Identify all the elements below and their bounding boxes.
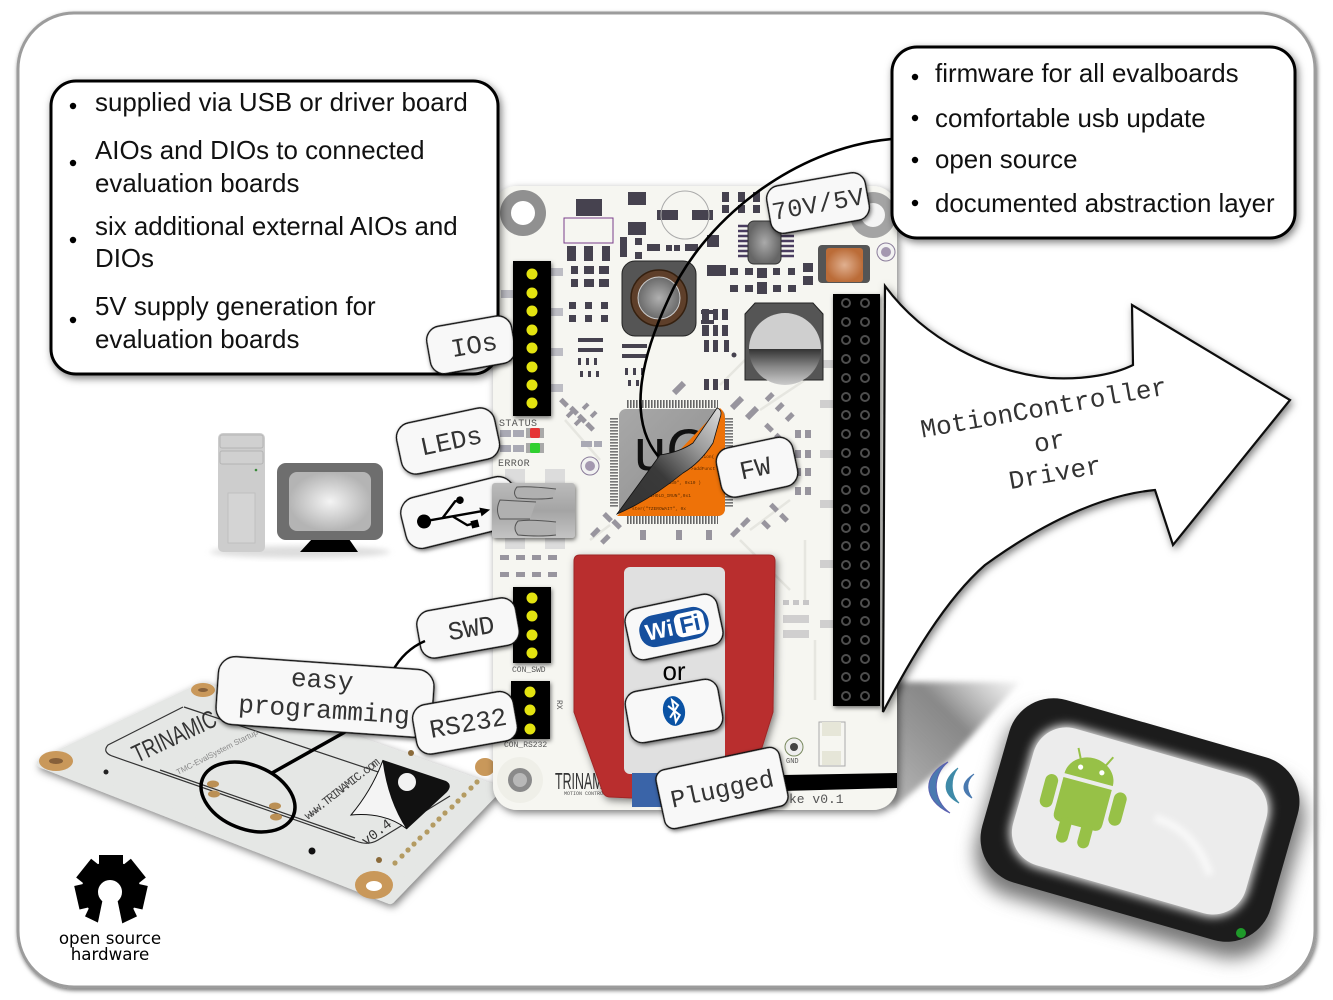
- label: SWD: [415, 596, 521, 660]
- callout: firmware features: [892, 47, 1295, 238]
- gear: [74, 855, 148, 927]
- bullets: [70, 103, 76, 323]
- firmware text: [935, 60, 1275, 218]
- power led: [1236, 928, 1246, 938]
- label: usb: [397, 473, 523, 552]
- firmware text: open source: [935, 146, 1078, 174]
- inductor: [818, 245, 870, 283]
- status LEDs: [500, 428, 602, 453]
- feature text: AIOs and DIOs to connected: [95, 137, 425, 165]
- wireless waves: [929, 762, 974, 813]
- label: FW (behind firmware edge): [714, 435, 800, 500]
- firmware code: ster("TZEROWAIT", 0x: [632, 506, 686, 512]
- firmware layer: [617, 408, 725, 516]
- microcontroller: [614, 404, 729, 520]
- feature text: DIOs: [95, 245, 154, 273]
- bluetooth label: [623, 677, 725, 745]
- firmware leader line: [640, 139, 892, 456]
- url on back of board: www.TRINAMIC.com: [302, 755, 383, 823]
- board version: v0.4: [359, 817, 396, 850]
- error led text: ERROR: [498, 459, 530, 470]
- gnd silk: GND: [786, 758, 799, 766]
- usb connector: [505, 469, 565, 549]
- main board: [493, 186, 897, 810]
- wifi label: Fi: [677, 609, 703, 638]
- label: Plugged: Plugged: [668, 765, 777, 816]
- label: SWD: SWD: [446, 611, 497, 648]
- swd connector: [513, 587, 551, 663]
- smd outline bottom right: [819, 722, 845, 766]
- label: 70V/5V: [765, 171, 871, 235]
- wifi label: Wi: [643, 615, 676, 646]
- label: easy programming: [215, 656, 435, 738]
- arrow floor shadow: [890, 682, 1020, 810]
- swd silk text: CON_SWD: [512, 666, 546, 675]
- bottom right test point: [785, 738, 803, 756]
- second board: bottom view in perspective: [39, 683, 495, 899]
- GND test point top right: [877, 243, 895, 261]
- leader line ellipse to easy programming: [272, 732, 345, 773]
- row of gold pads: [392, 779, 480, 866]
- label: RS232: RS232: [427, 703, 509, 746]
- firmware code: [632, 454, 723, 512]
- trinamic board logo: TRINAMIC: [555, 768, 615, 794]
- blue module tail: [632, 773, 665, 807]
- programming pads: [207, 780, 282, 820]
- label: easy programming: easy: [290, 664, 354, 698]
- label: 70V/5V: 70V/5V: [770, 183, 867, 228]
- pin connector: IOs: [513, 261, 551, 416]
- logo text: open source: [59, 928, 161, 948]
- chip marking: uC: [634, 418, 708, 483]
- open source hardware logo: hardware: [71, 944, 149, 964]
- firmware text: documented abstraction layer: [935, 190, 1275, 218]
- trinamic logo on back of board: TRINAMIC: [128, 705, 221, 768]
- electrolytic capacitor: [745, 303, 823, 385]
- faint copper traces: [565, 360, 815, 700]
- open source hardware logo: [59, 855, 161, 964]
- firmware code: ("IHOLD_IRUN",0x1: [645, 493, 691, 499]
- connector side pads: [501, 268, 563, 392]
- feature text: [95, 89, 468, 354]
- or: or: [662, 656, 686, 686]
- big arrow: [883, 286, 1290, 712]
- label: LEDs: LEDs: [418, 421, 485, 463]
- label: Plugged: [654, 746, 790, 830]
- arrow text: [918, 373, 1181, 511]
- firmware text: firmware for all evalboards: [935, 60, 1239, 88]
- arrow text: Driver: [1007, 451, 1104, 497]
- label: IOs: [424, 314, 517, 376]
- usb socket body: [492, 483, 575, 538]
- feature text: 5V supply generation for: [95, 293, 376, 321]
- firmware code: Fields->addFunct: [672, 466, 716, 472]
- mounting holes: [497, 190, 896, 803]
- round capacitor outline: [661, 191, 709, 239]
- firmware code: "TMC5130", 0x10 ): [655, 480, 701, 486]
- wifi label: [623, 592, 725, 662]
- QFN IC: [738, 221, 794, 264]
- black logo corner: [351, 760, 450, 829]
- black stripe: [783, 773, 897, 791]
- rs232 connector: [511, 681, 550, 739]
- rx silk text: RX: [554, 700, 563, 710]
- label: easy programming: programming: [237, 690, 411, 732]
- feature text: supplied via USB or driver board: [95, 89, 468, 117]
- label: IOs: IOs: [449, 327, 500, 365]
- label: LEDs: [394, 405, 502, 477]
- PC: tower and monitor: [210, 433, 390, 558]
- red plug-in module: [574, 555, 775, 807]
- arrow text: MotionController: [918, 373, 1169, 446]
- SMD footprints: [567, 192, 813, 390]
- peeled sticker: [617, 408, 721, 514]
- label: FW (behind firmware edge): FW: [737, 452, 774, 487]
- arrow text: or: [1032, 425, 1068, 460]
- programming highlight ellipse: [191, 749, 305, 845]
- label: RS232: [410, 689, 520, 756]
- coil: [622, 261, 696, 336]
- small print: TMC-EvalSystem Startup: [175, 728, 260, 777]
- feature text: evaluation boards: [95, 170, 299, 198]
- android robot: [1030, 742, 1136, 856]
- diode outline: [564, 218, 613, 243]
- bullets: [912, 74, 918, 206]
- firmware text: comfortable usb update: [935, 105, 1206, 133]
- android device: [965, 687, 1315, 969]
- feature text: evaluation boards: [95, 326, 299, 354]
- feature text: six additional external AIOs and: [95, 213, 458, 241]
- leader line SWD to easy programming: [392, 641, 425, 672]
- GND via: [581, 457, 599, 475]
- rs232 silk text: CON_RS232: [504, 741, 547, 750]
- light rotated footprints: [500, 360, 833, 638]
- firmware code: Function( 0x: [690, 454, 723, 460]
- board version silk: ke v0.1: [789, 792, 844, 807]
- status led text: STATUS: [499, 419, 537, 430]
- motion control silk: MOTION CONTROL: [564, 791, 606, 797]
- pin header: [833, 294, 880, 706]
- callout: hardware features: [51, 81, 498, 374]
